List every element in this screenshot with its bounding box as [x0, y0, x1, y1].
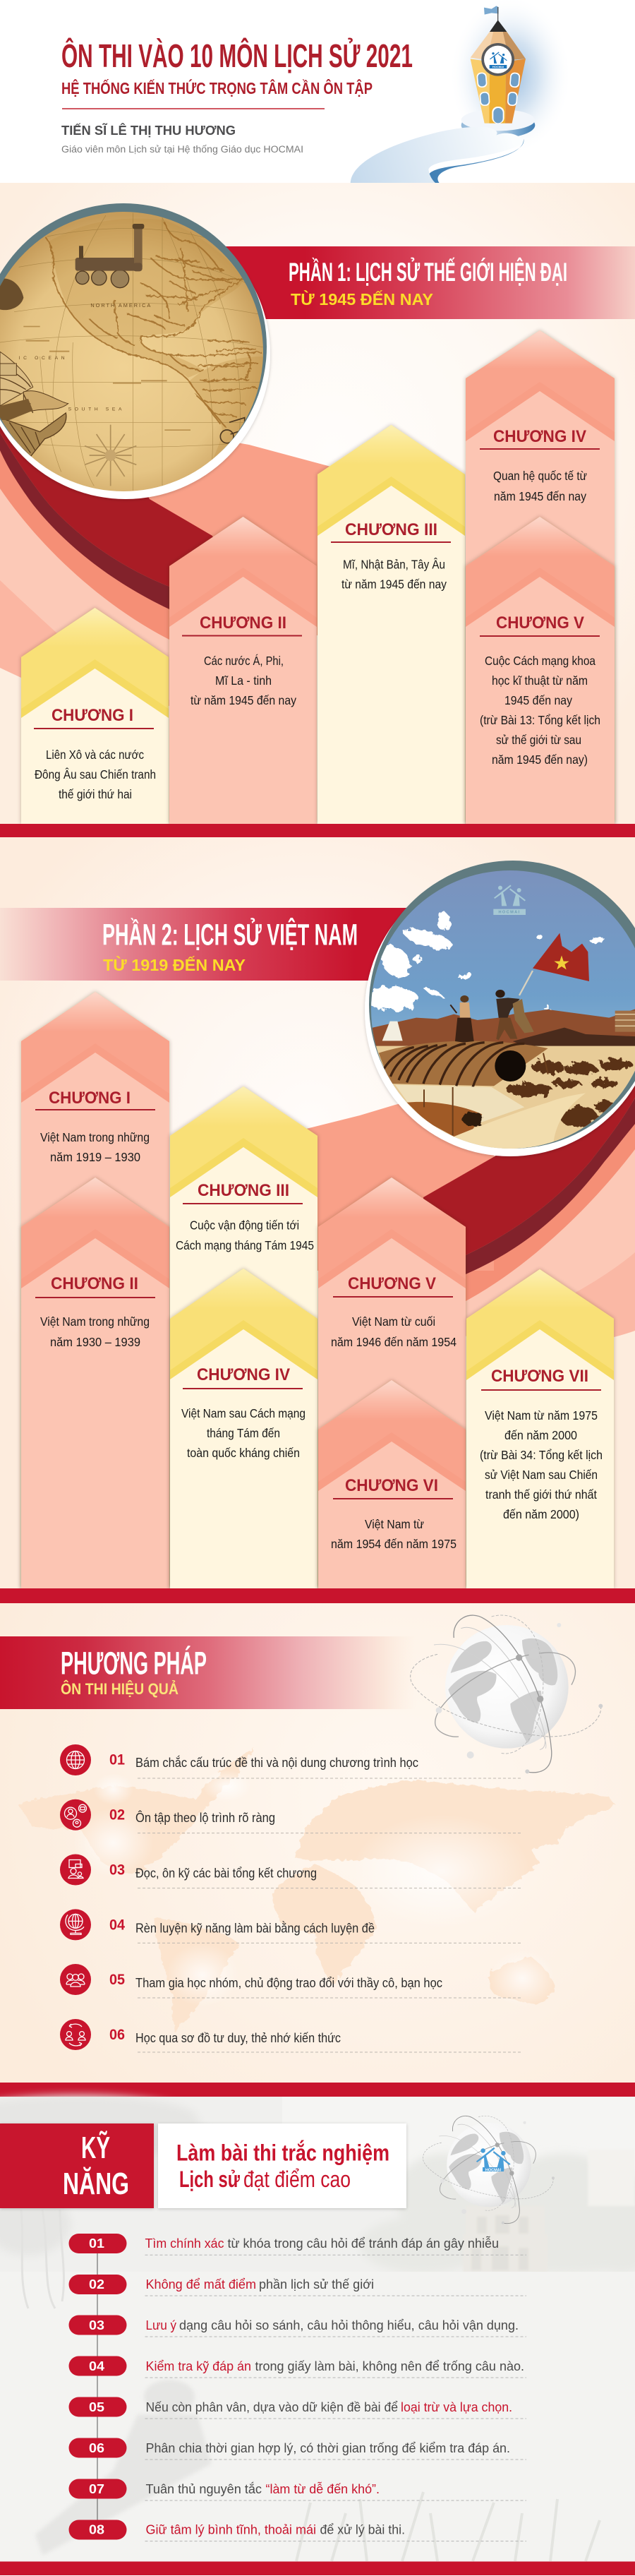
body text: tranh thế giới thứ nhất — [485, 1487, 597, 1502]
list item 02: Ôn tập theo lộ trình rõ ràng — [135, 1810, 275, 1825]
skill row 06 — [69, 2438, 526, 2460]
skill row 07: Tuân thủ nguyên tắc — [145, 2481, 262, 2496]
body text — [40, 1130, 150, 1164]
body text: Việt Nam từ cuối — [352, 1314, 435, 1329]
body text — [331, 1517, 456, 1551]
author name: TIẾN SĨ LÊ THỊ THU HƯƠNG — [61, 123, 236, 138]
card: chương V (part 2) — [318, 1178, 466, 1588]
banner: part 1 — [212, 246, 635, 319]
skill row 02: 02 — [89, 2277, 104, 2292]
card: chương VI (part 2) — [318, 1380, 466, 1588]
list item 01 — [60, 1744, 521, 1778]
skill row 08: 08 — [89, 2523, 104, 2537]
body text: Việt Nam từ năm 1975 — [485, 1408, 598, 1422]
skill row 05: Nếu còn phân vân, dựa vào dữ kiện đề bài để — [145, 2400, 398, 2414]
heading: CHƯƠNG IV — [197, 1365, 290, 1384]
skill row 05: loại trừ và lựa chọn. — [401, 2400, 512, 2414]
image: antique world map globe: SOUTH SEA — [68, 407, 125, 412]
image: Dien Bien Phu victory flag photo: HOCMAI — [499, 911, 520, 915]
body text: học kĩ thuật từ năm — [492, 673, 588, 688]
body text: từ năm 1945 đến nay — [190, 693, 296, 707]
body text: Cuộc vận động tiến tới — [190, 1218, 299, 1233]
body text — [480, 1408, 603, 1521]
skill row 03: Lưu ý — [145, 2318, 177, 2332]
body text: Mĩ, Nhật Bản, Tây Âu — [343, 558, 445, 572]
panel: skills title box — [158, 2123, 406, 2208]
skill row 04: trong giấy làm bài, không nên để trống câu nào. — [255, 2359, 524, 2373]
card: chương IV (part 2) — [170, 1269, 318, 1588]
red footer band — [0, 2561, 635, 2575]
body text: sử Việt Nam sau Chiến — [485, 1468, 598, 1482]
body text: đến năm 2000) — [503, 1507, 579, 1521]
body text: Mĩ La - tinh — [215, 673, 272, 688]
heading: CHƯƠNG IV — [493, 427, 586, 446]
list item 03: 03 — [109, 1862, 125, 1878]
body text — [341, 558, 447, 592]
list item 04 — [60, 1909, 521, 1943]
body text: năm 1945 đến nay) — [492, 753, 588, 767]
banner: part 1: TỪ 1945 ĐẾN NAY — [291, 289, 433, 308]
heading: CHƯƠNG III — [345, 520, 437, 539]
image: antique world map globe: IC OCEAN — [19, 356, 68, 361]
skill row 04: Kiểm tra kỹ đáp án — [145, 2359, 251, 2373]
panel: skills title box: Lịch sử — [179, 2167, 241, 2192]
list item 01: Bám chắc cấu trúc đề thi và nội dung chương trình học — [135, 1755, 418, 1770]
body text — [40, 1314, 150, 1349]
panel: KỸ NĂNG heading box: KỸ — [81, 2130, 110, 2165]
decorative world map — [18, 1748, 615, 2032]
heading: CHƯƠNG VII — [491, 1367, 588, 1386]
skill row 03 — [69, 2316, 526, 2337]
panel: KỸ NĂNG heading box — [0, 2123, 154, 2208]
card: chương III (part 2) — [170, 1086, 318, 1588]
panel: part 2 background — [0, 837, 635, 1588]
list item 06 — [60, 2019, 521, 2052]
card: chương IV (part 1) — [466, 330, 615, 824]
body text: Việt Nam từ — [365, 1517, 424, 1531]
title: ÔN THI VÀO 10 MÔN LỊCH SỬ 2021 — [61, 37, 413, 74]
illustration: pencil school building on road: HOCMAI — [492, 65, 504, 68]
body text — [493, 469, 587, 503]
panel: skills title box: đạt điểm cao — [243, 2167, 351, 2192]
skill row 01 — [69, 2234, 526, 2255]
image: Dien Bien Phu victory flag photo — [365, 861, 635, 1156]
body text: Đông Âu sau Chiến tranh — [35, 767, 156, 781]
decorative arcs part 2 — [303, 1024, 635, 1341]
body text — [190, 654, 296, 707]
skill row 03: dạng câu hỏi so sánh, câu hỏi thông hiểu, câu hỏi vận dụng. — [179, 2318, 519, 2332]
body text: Các nước Á, Phi, — [204, 654, 284, 668]
body text: Cuộc Cách mạng khoa — [485, 654, 595, 668]
body text: toàn quốc kháng chiến — [187, 1446, 300, 1460]
skill row 02: Không để mất điểm — [145, 2277, 256, 2292]
body text: từ năm 1945 đến nay — [341, 577, 447, 592]
icon: globe — [60, 1744, 91, 1775]
red divider band — [0, 824, 635, 837]
body text: Cách mạng tháng Tám 1945 — [176, 1238, 314, 1252]
card: chương I (part 1) — [21, 608, 169, 824]
list item 05 — [60, 1964, 521, 1998]
list item 01: 01 — [109, 1752, 125, 1768]
body text: năm 1919 – 1930 — [50, 1150, 140, 1164]
panel: method background — [0, 1603, 635, 2083]
timeline connector — [97, 2243, 98, 2529]
icon: exchange between two people — [60, 2019, 91, 2050]
skill row 02: phần lịch sử thế giới — [259, 2277, 374, 2292]
body text: Việt Nam sau Cách mạng — [181, 1406, 306, 1420]
author role: Giáo viên môn Lịch sử tại Hệ thống Giáo dục HOCMAI — [61, 144, 303, 155]
list item 02: 02 — [109, 1807, 125, 1823]
skill row 01: từ khóa trong câu hỏi để tránh đáp án gây nhiễu — [227, 2236, 499, 2251]
body text: (trừ Bài 13: Tổng kết lịch — [480, 713, 600, 727]
card: chương VII (part 2) — [466, 1269, 614, 1588]
illustration: small globe with HOCMAI logo: HOCMAI — [485, 2169, 502, 2173]
panel: part 1 background — [0, 183, 635, 824]
list item 06: 06 — [109, 2027, 125, 2043]
skill row 06: 06 — [89, 2441, 104, 2455]
decorative arcs part 1 — [0, 353, 395, 706]
image: antique world map globe — [0, 203, 270, 499]
body text — [181, 1406, 306, 1460]
icon: group of people — [60, 1964, 91, 1995]
list item 05: 05 — [109, 1972, 125, 1988]
illustration: small globe with HOCMAI logo — [423, 2116, 555, 2224]
list item 03 — [60, 1854, 521, 1888]
skill row 03: 03 — [89, 2318, 104, 2332]
body text: sử thế giới từ sau — [496, 733, 581, 747]
body text — [480, 654, 600, 767]
red divider band — [0, 2083, 635, 2097]
skill row 05 — [69, 2397, 526, 2419]
skill row 01: 01 — [89, 2236, 104, 2251]
banner: method: PHƯƠNG PHÁP — [61, 1645, 207, 1682]
body text: (trừ Bài 34: Tổng kết lịch — [480, 1448, 603, 1462]
list item 04: Rèn luyện kỹ năng làm bài bằng cách luyện đề — [135, 1920, 375, 1936]
body text: thế giới thứ hai — [59, 787, 132, 801]
heading: CHƯƠNG I — [52, 706, 133, 725]
body text: Việt Nam trong những — [40, 1130, 150, 1144]
list item 04: 04 — [109, 1917, 125, 1933]
card: chương III (part 1) — [318, 425, 465, 824]
heading: CHƯƠNG VI — [345, 1476, 438, 1495]
panel: KỸ NĂNG heading box: NĂNG — [63, 2166, 129, 2201]
list item 02 — [60, 1799, 521, 1833]
body text: đến năm 2000 — [504, 1428, 577, 1442]
image: antique world map globe: NORTH AMERICA — [90, 302, 152, 308]
body text: năm 1930 – 1939 — [50, 1335, 140, 1349]
card: chương II (part 2) — [21, 1178, 169, 1588]
skill row 04: 04 — [89, 2359, 104, 2373]
list item 05: Tham gia học nhóm, chủ động trao đổi với thầy cô, bạn học — [135, 1975, 442, 1990]
illustration: pencil school building on road — [351, 0, 572, 184]
banner: part 2: TỪ 1919 ĐẾN NAY — [103, 955, 246, 974]
banner: part 2: PHẦN 2: LỊCH SỬ VIỆT NAM — [102, 918, 358, 952]
body text: Liên Xô và các nước — [46, 748, 144, 762]
icon: people network — [60, 1799, 91, 1831]
skill row 08 — [69, 2520, 526, 2541]
banner: part 2 — [0, 908, 409, 981]
body text: năm 1954 đến năm 1975 — [331, 1537, 456, 1551]
body text: năm 1945 đến nay — [494, 489, 586, 503]
heading: CHƯƠNG V — [348, 1274, 436, 1293]
skill row 08: để xử lý bài thi. — [320, 2522, 405, 2537]
panel: skills ghost photo of Hoan Kiem lake — [0, 2095, 635, 2562]
skill row 01: Tìm chính xác — [145, 2236, 224, 2251]
body text — [176, 1218, 314, 1252]
list item 06: Học qua sơ đồ tư duy, thẻ nhớ kiến thức — [135, 2030, 341, 2045]
body text — [331, 1314, 456, 1349]
skill row 08: Giữ tâm lý bình tĩnh, thoải mái — [145, 2522, 316, 2537]
icon: desk globe — [60, 1909, 91, 1940]
banner: method: ÔN THI HIỆU QUẢ — [61, 1680, 179, 1698]
heading: CHƯƠNG I — [49, 1089, 131, 1108]
skill row 05: 05 — [89, 2400, 104, 2414]
heading: CHƯƠNG III — [198, 1181, 289, 1200]
skill row 07: “làm từ dễ đến khó”. — [265, 2481, 380, 2496]
panel: skills title box: Làm bài thi trắc nghiệm — [176, 2140, 389, 2166]
heading: CHƯƠNG II — [200, 613, 286, 633]
body text: tháng Tám đến — [207, 1426, 280, 1440]
card: chương V (part 1) — [466, 517, 615, 824]
heading: CHƯƠNG V — [496, 613, 584, 633]
skill row 07 — [69, 2479, 526, 2500]
body text: 1945 đến nay — [504, 693, 572, 707]
card: chương II (part 1) — [169, 517, 317, 824]
list item 03: Đọc, ôn kỹ các bài tổng kết chương — [135, 1865, 317, 1881]
body text — [35, 748, 156, 801]
body text: năm 1946 đến năm 1954 — [331, 1335, 456, 1349]
red divider band — [0, 1588, 635, 1603]
body text: Việt Nam trong những — [40, 1314, 150, 1329]
skill row 07: 07 — [89, 2482, 104, 2496]
banner: method — [0, 1636, 416, 1709]
icon: reader with screen — [60, 1854, 91, 1885]
skill row 02 — [69, 2275, 526, 2296]
skill row 04 — [69, 2356, 526, 2378]
card: chương I (part 2) — [21, 992, 169, 1588]
skill row 06: Phân chia thời gian hợp lý, có thời gian trống để kiểm tra đáp án. — [145, 2440, 510, 2455]
illustration: globe with orbits — [411, 1615, 603, 1773]
body text: Quan hệ quốc tế từ — [493, 469, 587, 483]
subtitle: HỆ THỐNG KIẾN THỨC TRỌNG TÂM CẦN ÔN TẬP — [61, 78, 373, 97]
heading: CHƯƠNG II — [51, 1274, 138, 1293]
